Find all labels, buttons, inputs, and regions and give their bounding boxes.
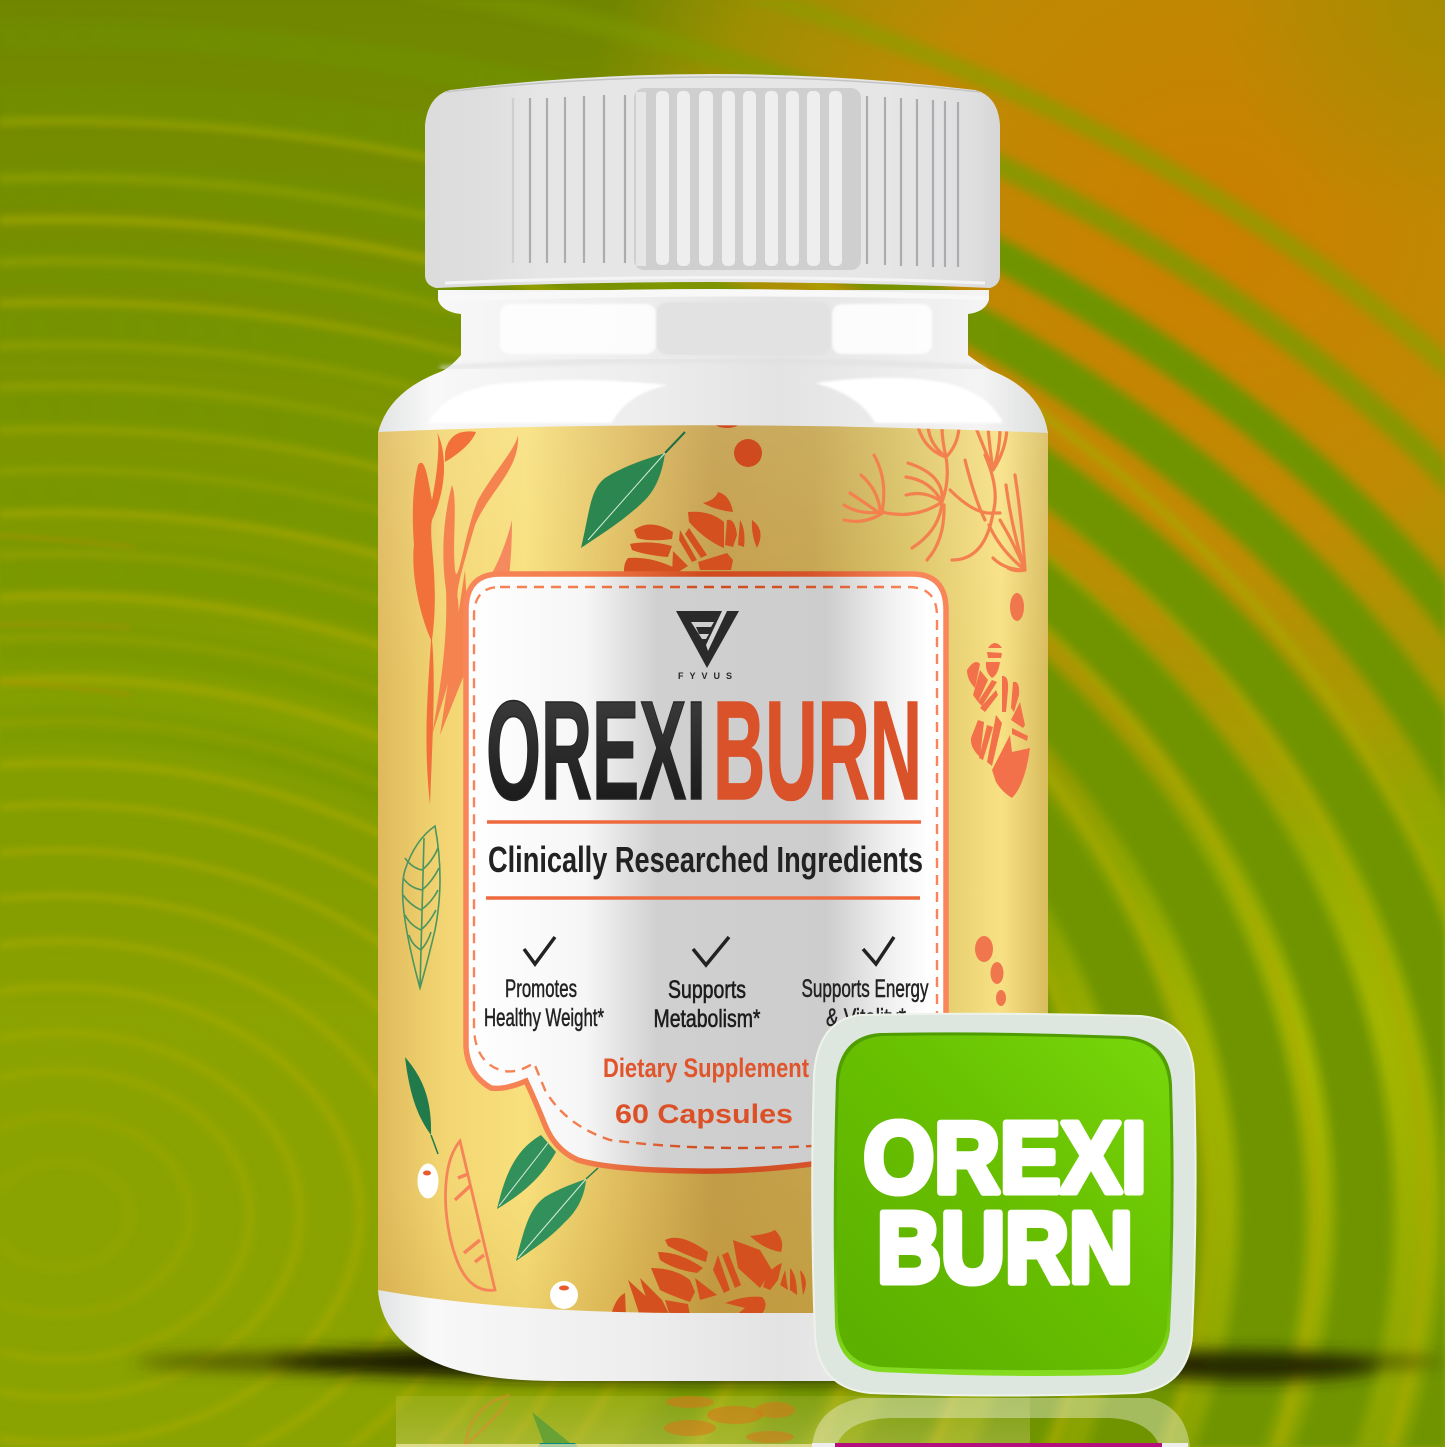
benefit: healthy weight	[484, 937, 604, 1032]
tagline: Clinically Researched Ingredients	[488, 839, 923, 880]
bottle body	[378, 290, 1048, 1381]
plant: turmeric bottom	[611, 1230, 806, 1316]
brand logo: FYVUS	[678, 671, 738, 681]
orange dots	[714, 416, 1024, 1006]
benefit: energy: & Vitality*	[826, 1004, 906, 1032]
product name: OREXI	[486, 671, 706, 829]
benefit: healthy weight: Healthy Weight*	[484, 1004, 604, 1032]
plant: turmeric right	[967, 643, 1030, 798]
plant: turmeric top	[624, 492, 761, 578]
benefit: metabolism: Metabolism*	[654, 1005, 761, 1033]
label wrap	[378, 416, 1048, 1318]
plant: coral top right	[844, 427, 1025, 571]
shoulder highlights	[429, 378, 1003, 423]
cap ridges	[513, 95, 958, 267]
benefit: energy: Supports Energy	[802, 975, 929, 1003]
plant: outline root	[445, 1141, 495, 1290]
brand logo	[676, 611, 739, 681]
cap grip block	[634, 88, 861, 270]
product name: BURN	[713, 671, 922, 829]
plant: orange seaweed	[413, 431, 518, 805]
benefit: metabolism: Supports	[668, 976, 746, 1004]
floor shadow	[135, 1343, 1445, 1381]
dietary supplement: Dietary Supplement	[603, 1053, 809, 1083]
plant: green leaves bottom	[405, 1057, 598, 1261]
badge	[812, 1014, 1196, 1396]
plant: green outline leaf	[403, 826, 440, 988]
plant: green leaf top	[581, 432, 685, 548]
badge text: OREXI	[864, 1102, 1146, 1214]
benefit: healthy weight: Promotes	[505, 975, 577, 1003]
benefit: metabolism	[654, 937, 761, 1033]
white seeds	[418, 1164, 578, 1309]
bottle reflection	[396, 1395, 1190, 1447]
neck highlights	[500, 302, 932, 355]
badge text: BURN	[877, 1192, 1133, 1304]
cap	[425, 74, 1000, 288]
benefit: energy	[802, 937, 929, 1032]
bottle	[378, 74, 1048, 1381]
white label panel	[466, 574, 946, 1171]
badge text	[864, 1102, 1146, 1304]
capsule count: 60 Capsules	[615, 1099, 793, 1129]
